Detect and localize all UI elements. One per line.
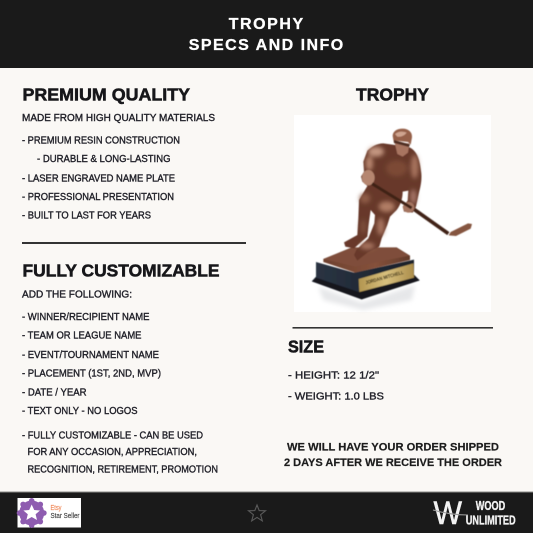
heading: size: SIZE	[288, 337, 324, 357]
footer bar	[0, 492, 533, 533]
shipping note: WE WILL HAVE YOUR ORDER SHIPPED	[287, 442, 499, 454]
quality feature list: - PROFESSIONAL PRESENTATION	[22, 191, 174, 203]
right glove	[403, 202, 414, 213]
customization option list: - TEAM OR LEAGUE NAME	[22, 330, 142, 342]
etsy wordmark: Etsy	[50, 505, 62, 512]
star seller label: Star Seller	[50, 513, 80, 520]
icon: serif W monogram: W	[434, 495, 463, 531]
name plate: JORDAN MITCHELL	[365, 270, 404, 286]
panel: premium quality	[22, 84, 215, 222]
customization option list: - TEXT ONLY - NO LOGOS	[22, 405, 138, 417]
wordmark: unlimited: UNLIMITED	[466, 514, 516, 528]
heading: premium quality: PREMIUM QUALITY	[22, 84, 190, 104]
black base	[312, 260, 420, 299]
head and helmet	[393, 129, 412, 157]
quality feature list: - DURABLE & LONG-LASTING	[37, 153, 170, 165]
customization option list	[22, 311, 161, 417]
reflection	[318, 285, 415, 310]
shipping note	[284, 442, 502, 469]
hockey stick	[412, 208, 472, 236]
icon: outlined star	[248, 505, 266, 521]
customization option list: - PLACEMENT (1ST, 2ND, MVP)	[22, 368, 161, 380]
figure highlights	[360, 147, 418, 249]
subheading: materials: MADE FROM HIGH QUALITY MATERIALS	[22, 112, 215, 124]
occasion note: FOR ANY OCCASION, APPRECIATION,	[28, 446, 197, 458]
trophy photo	[294, 115, 491, 312]
occasion note: RECOGNITION, RETIREMENT, PROMOTION	[28, 463, 218, 475]
heading: fully customizable: FULLY CUSTOMIZABLE	[22, 261, 220, 281]
quality feature list	[22, 134, 180, 222]
icon: purple scalloped seal	[17, 498, 47, 528]
wood plinth	[323, 247, 410, 273]
stick shaft over body	[372, 184, 412, 208]
quality feature list: - BUILT TO LAST FOR YEARS	[22, 210, 151, 222]
wood unlimited logo	[433, 495, 516, 531]
header banner	[0, 0, 533, 68]
customization option list: - EVENT/TOURNAMENT NAME	[22, 349, 159, 361]
panel: fully customizable	[22, 261, 220, 475]
figure silhouette	[344, 143, 421, 261]
quality feature list: - PREMIUM RESIN CONSTRUCTION	[22, 134, 180, 146]
shipping note: 2 DAYS AFTER WE RECEIVE THE ORDER	[284, 457, 502, 469]
occasion note	[22, 429, 218, 475]
heading: trophy: TROPHY	[356, 84, 429, 104]
etsy star seller badge	[17, 498, 81, 528]
height spec: - HEIGHT: 12 1/2"	[288, 370, 379, 382]
quality feature list: - LASER ENGRAVED NAME PLATE	[22, 172, 175, 184]
wordmark: wood: WOOD	[476, 499, 505, 513]
header title line 2: SPECS AND INFO	[189, 37, 343, 54]
occasion note: - FULLY CUSTOMIZABLE - CAN BE USED	[22, 429, 203, 441]
customization option list: - WINNER/RECIPIENT NAME	[22, 311, 150, 323]
name plate	[359, 263, 414, 292]
customization option list: - DATE / YEAR	[22, 386, 87, 398]
panel: size	[288, 337, 384, 402]
header title line 1: TROPHY	[229, 16, 304, 33]
weight spec: - WEIGHT: 1.0 LBS	[288, 390, 384, 402]
left glove	[362, 170, 375, 185]
subheading: add the following: ADD THE FOLLOWING:	[22, 289, 132, 301]
